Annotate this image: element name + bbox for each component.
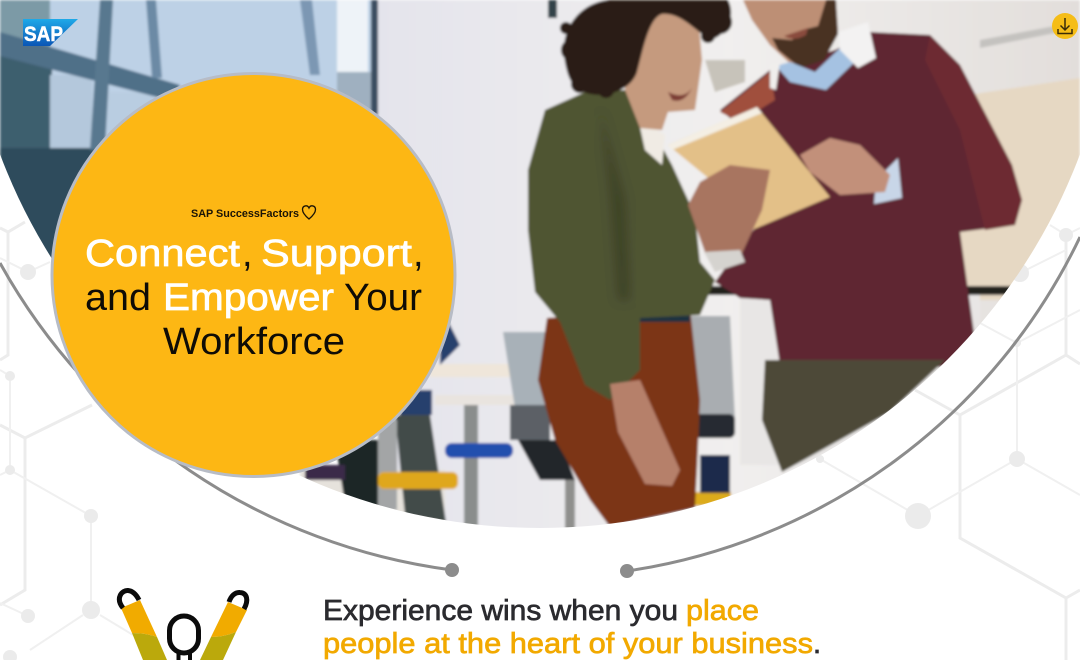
title line 1: ,: [413, 233, 424, 275]
icon: download button: [1052, 13, 1078, 39]
SAP logo: SAP: [24, 23, 63, 46]
SAP logo: [23, 19, 78, 46]
brand label: SAP SuccessFactors: SAP SuccessFactors: [191, 208, 299, 220]
man: [714, 30, 987, 368]
headline line 1: place: [686, 595, 759, 627]
curved connector line: right: [627, 237, 1080, 571]
title line 3: Workforce: [163, 321, 345, 363]
headline line 2: .: [813, 628, 821, 660]
title line 2: Your: [344, 277, 422, 319]
title line 2: and: [85, 277, 151, 319]
title line 1: Support: [261, 233, 413, 275]
title line 1: ,: [242, 233, 253, 275]
connector dot: right: [620, 564, 634, 578]
woman: [538, 308, 700, 527]
icon: person with raised arms: [119, 590, 247, 660]
yellow title circle: [52, 74, 455, 476]
title line 2: [85, 277, 422, 319]
title line 2: Empower: [163, 277, 334, 319]
curved connector line: left: [0, 263, 452, 570]
headline line 2: people at the heart of your business: [323, 628, 813, 660]
headline text: [323, 595, 821, 660]
icon: heart outline: [302, 206, 316, 219]
headline line 1: Experience wins when you: [323, 595, 678, 627]
title line 1: [85, 233, 424, 275]
title line 1: Connect: [85, 233, 240, 275]
connector dot: left: [445, 563, 459, 577]
